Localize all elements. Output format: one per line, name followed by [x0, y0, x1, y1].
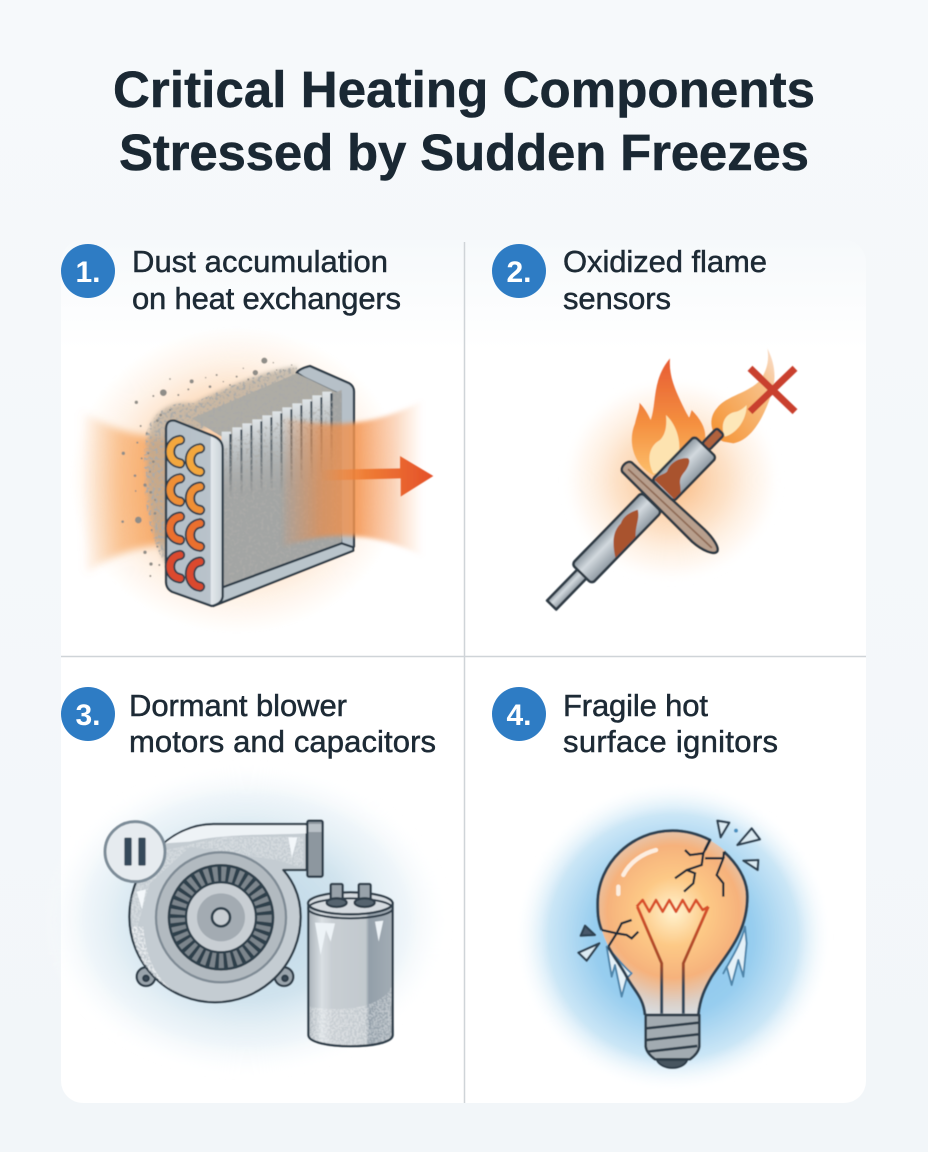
cold blue glow [513, 780, 833, 1093]
orange heat glow [70, 327, 403, 633]
panel: dust accumulation on heat exchangers [61, 244, 433, 633]
lower rust [600, 507, 650, 558]
heading 3: Dormant blower [129, 688, 347, 723]
illustration: cracked glowing bulb [513, 780, 833, 1093]
weak flame [711, 348, 775, 443]
glass shards [578, 821, 760, 961]
number badge 4: 4. [506, 699, 532, 732]
heading 1: Dust accumulation [132, 244, 388, 279]
cracks [602, 840, 724, 947]
heading 2 [563, 244, 767, 316]
heading 1 [132, 244, 401, 316]
number badge 4 [492, 687, 546, 741]
fins [222, 392, 333, 497]
heading 2: Oxidized flame [563, 244, 767, 279]
content card [61, 240, 866, 1103]
illustration: frosted blower and capacitor [40, 760, 453, 1080]
fan assembly [156, 852, 286, 982]
glass bulb [598, 831, 747, 1015]
heading 4: surface ignitors [563, 724, 778, 759]
heading 3 [129, 688, 436, 759]
red X [750, 368, 795, 412]
panel: oxidized flame sensors [492, 244, 795, 662]
coils [170, 440, 200, 587]
sensor probe [519, 399, 779, 662]
electrode tip [702, 428, 724, 450]
rod [547, 567, 589, 609]
dust mass behind [144, 367, 300, 570]
ice left [607, 947, 632, 997]
number badge 3: 3. [75, 699, 101, 732]
pause badge [105, 822, 165, 882]
fin face [192, 373, 342, 588]
upper rust [654, 452, 701, 499]
mounting ears [137, 967, 293, 986]
bulb outline [598, 831, 747, 1015]
fin dust overlay [222, 397, 342, 588]
panel: fragile hot surface ignitors [492, 687, 833, 1093]
ice right [723, 927, 747, 985]
heading 4 [563, 688, 778, 759]
number badge 1: 1. [75, 256, 101, 289]
heading 1: on heat exchangers [132, 281, 401, 316]
upper body [652, 436, 716, 501]
bottom frame [213, 543, 353, 606]
flange rust band [628, 468, 712, 549]
number badge 2: 2. [506, 256, 532, 289]
illustration: corroded flame sensor [519, 348, 795, 662]
flange [619, 458, 722, 559]
capacitor icicles [315, 921, 383, 955]
lower body [572, 492, 662, 584]
number badge 2 [492, 244, 546, 298]
cold glow [40, 760, 453, 1080]
heading 4: Fragile hot [563, 688, 708, 723]
number badge 1 [61, 244, 115, 298]
panel: dormant blower motors and capacitors [40, 687, 453, 1080]
illustration: dusty heat exchanger [70, 327, 433, 633]
heading 2: sensors [563, 281, 671, 316]
title: Stressed by Sudden Freezes [119, 124, 809, 181]
blower housing [129, 824, 307, 1002]
outlet flange [307, 821, 323, 877]
screw base [646, 1015, 699, 1068]
orange sensor glow [558, 373, 785, 587]
title: Critical Heating Components [113, 61, 815, 118]
outgoing heat stream [283, 400, 423, 557]
title [113, 61, 815, 181]
heading 3: motors and capacitors [129, 724, 436, 759]
number badge 3 [61, 687, 115, 741]
capacitor [308, 884, 393, 1046]
back end plate [297, 366, 354, 553]
front plate [166, 420, 223, 606]
terminals [327, 884, 375, 907]
arrow [320, 456, 433, 497]
dust particles [121, 358, 292, 577]
main flame [632, 358, 705, 475]
incoming heat stream [77, 408, 170, 573]
icicles [137, 837, 297, 909]
highlights [618, 850, 656, 894]
filament [637, 900, 708, 1013]
